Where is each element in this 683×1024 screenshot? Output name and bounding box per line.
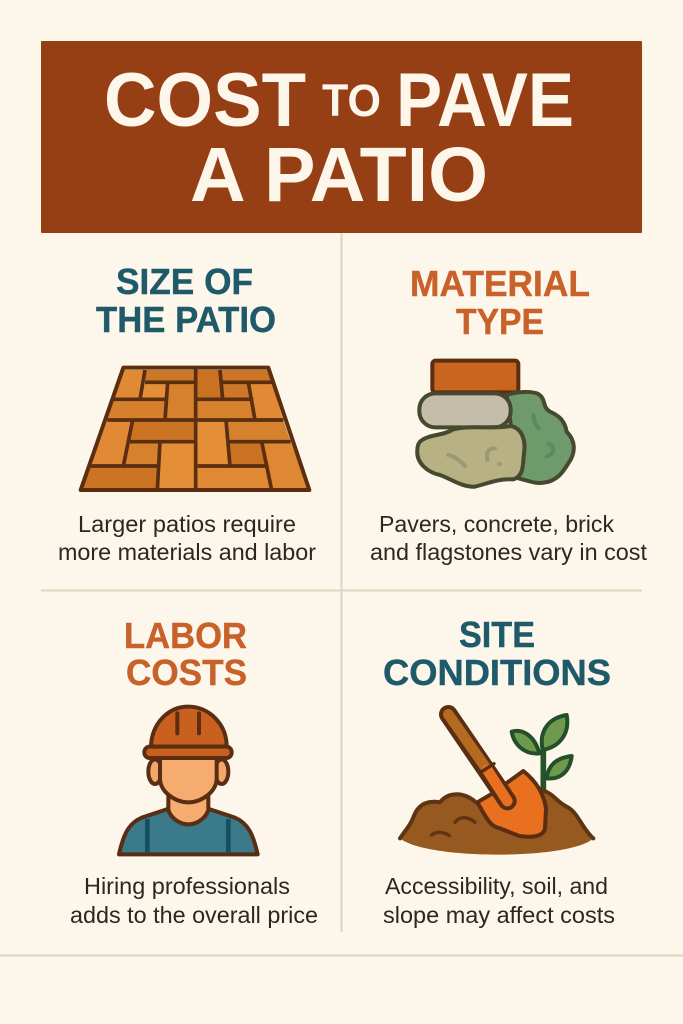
title banner: A PATIO (190, 132, 488, 218)
title banner (41, 41, 642, 233)
heading: labor costs: COSTS (126, 652, 247, 693)
description: labor costs: Hiring professionals (84, 873, 290, 899)
panel: labor costs (70, 615, 318, 928)
icon: shovel in soil with seedling (400, 714, 593, 855)
heading: size of the patio (96, 261, 276, 340)
description: labor costs: adds to the overall price (70, 902, 318, 928)
description: material type: Pavers, concrete, brick (379, 511, 614, 537)
description: labor costs (70, 873, 318, 928)
description: size of the patio: Larger patios require (78, 511, 296, 537)
title banner: TO (322, 75, 381, 126)
title banner: PAVE (396, 58, 574, 143)
heading: material type (410, 263, 590, 342)
panel: site conditions (383, 614, 615, 928)
description: site conditions: slope may affect costs (383, 902, 615, 928)
description: site conditions: Accessibility, soil, and (385, 873, 608, 899)
icon: stacked paving materials (417, 361, 574, 487)
heading: site conditions (383, 614, 611, 693)
heading: size of the patio: THE PATIO (96, 299, 276, 340)
description: size of the patio: more materials and labor (58, 539, 316, 565)
description: material type: and flagstones vary in cost (370, 539, 648, 565)
description: material type (370, 511, 648, 565)
title banner: COST (104, 58, 306, 143)
heading: site conditions: SITE (459, 614, 535, 655)
icon: brick paver grid (80, 368, 309, 490)
description: size of the patio (58, 511, 316, 565)
description: site conditions (383, 873, 615, 928)
heading: material type: TYPE (456, 301, 544, 342)
icon: construction worker (119, 707, 258, 854)
panel: material type (370, 263, 648, 565)
heading: labor costs (124, 615, 247, 693)
heading: size of the patio: SIZE OF (116, 261, 253, 302)
heading: site conditions: CONDITIONS (383, 652, 611, 693)
heading: material type: MATERIAL (410, 263, 590, 304)
panel: size of the patio (58, 261, 316, 565)
heading: labor costs: LABOR (124, 615, 247, 656)
